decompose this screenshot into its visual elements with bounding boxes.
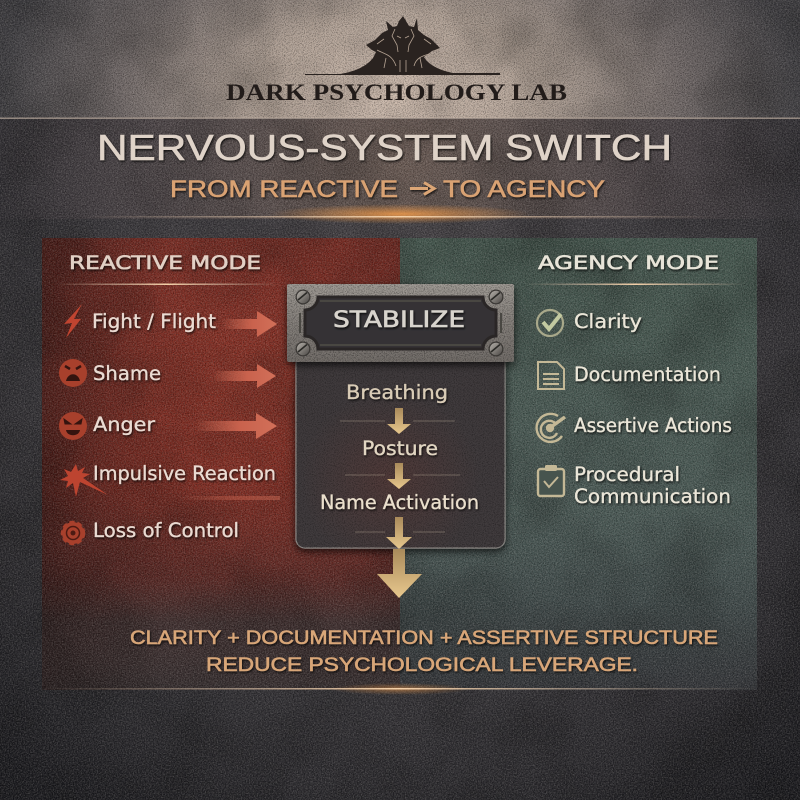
plate groove — [300, 301, 501, 345]
screws — [296, 290, 504, 356]
divider under logo — [0, 118, 800, 119]
arrow: large output arrow — [377, 549, 422, 598]
label: clarity: Clarity — [574, 310, 642, 333]
icon: loss of control gear — [62, 522, 84, 544]
label: fight / flight: Fight / Flight — [92, 310, 216, 333]
arrow: posture to name activation — [387, 463, 411, 489]
heading rule — [55, 284, 280, 285]
label: shame: Shame — [93, 362, 161, 385]
conclusion text: CLARITY + DOCUMENTATION + ASSERTIVE STRUCTURE — [130, 628, 718, 649]
icon: target — [537, 414, 565, 442]
label: procedural communication: Communication — [574, 485, 731, 508]
faded streak: impulsive reaction — [180, 496, 280, 500]
heading: reactive mode: REACTIVE MODE — [69, 252, 261, 274]
plate: stabilize — [287, 284, 514, 362]
icon: anger face — [59, 412, 87, 440]
label: loss of control: Loss of Control — [93, 519, 239, 542]
step: breathing: Breathing — [346, 381, 448, 404]
label: procedural communication — [574, 463, 731, 508]
icon: clipboard — [538, 465, 564, 496]
plate label: STABILIZE — [333, 308, 465, 333]
icon: shame face — [59, 359, 87, 387]
label: assertive actions: Assertive Actions — [574, 414, 732, 437]
brand name: DARK PSYCHOLOGY LAB — [226, 80, 567, 105]
subtitle: TO AGENCY — [443, 176, 605, 203]
panel: stabilize steps — [296, 355, 505, 549]
title: NERVOUS-SYSTEM SWITCH — [97, 127, 672, 168]
label: documentation: Documentation — [574, 363, 721, 386]
label: anger: Anger — [93, 413, 156, 436]
icon: check circle — [537, 310, 563, 336]
glowing divider — [80, 204, 720, 224]
icon: burst — [60, 464, 108, 497]
arrow: name activation down — [386, 517, 412, 549]
arrow: shame — [212, 364, 276, 388]
panel: agency mode content — [525, 252, 745, 508]
panel: reactive mode background — [42, 238, 400, 690]
arrow: fight / flight — [222, 311, 277, 337]
conclusion text — [130, 628, 718, 676]
icon: lightning bolt — [64, 304, 82, 338]
top light band — [0, 0, 800, 118]
step: name activation: Name Activation — [320, 491, 479, 514]
logo: three-headed wolf — [305, 16, 500, 75]
arrow: breathing to posture — [387, 408, 411, 434]
arrow: anger — [195, 413, 277, 439]
step: posture: Posture — [362, 437, 438, 460]
heading rule — [525, 284, 745, 285]
icon: document — [538, 362, 564, 389]
label: impulsive reaction: Impulsive Reaction — [93, 462, 276, 485]
subtitle: FROM REACTIVE — [170, 176, 398, 203]
bottom divider — [42, 683, 757, 695]
heading: agency mode: AGENCY MODE — [538, 252, 719, 274]
panel: agency mode background — [400, 238, 757, 690]
title band — [0, 119, 800, 219]
panel: reactive mode content — [55, 252, 280, 544]
divider lines between steps — [340, 421, 460, 532]
subtitle — [170, 176, 605, 203]
label: procedural communication: Procedural — [574, 463, 680, 486]
plate inner dark panel — [305, 297, 496, 349]
conclusion text: REDUCE PSYCHOLOGICAL LEVERAGE. — [206, 655, 638, 676]
